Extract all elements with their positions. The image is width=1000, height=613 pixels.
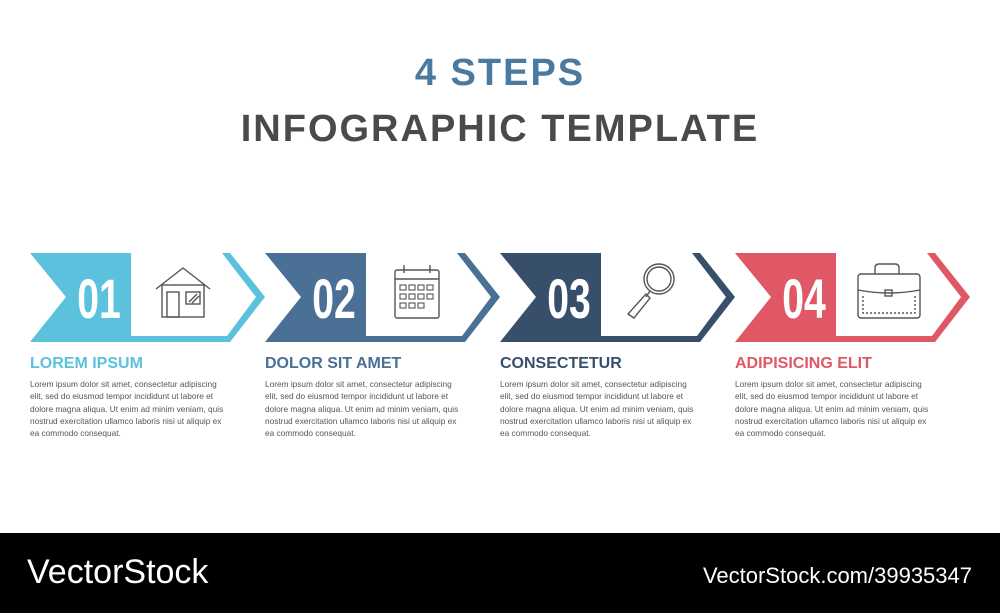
step 4 arrow: [735, 253, 970, 342]
heading 3: CONSECTETUR: [500, 355, 622, 372]
step 3 arrow: [500, 253, 735, 342]
heading 2: DOLOR SIT AMET: [265, 355, 401, 372]
subtitle: INFOGRAPHIC TEMPLATE: [241, 108, 759, 150]
footer id: VectorStock.com/39935347: [703, 563, 972, 588]
step numbers: [77, 268, 826, 331]
step numbers: 04: [782, 268, 826, 331]
step 2 arrow: [265, 253, 500, 342]
footer bar: [0, 533, 1000, 613]
text 2: Lorem ipsum dolor sit amet, consectetur adipiscing elit, sed do eiusmod tempor incididunt ut labore et dolore magna aliqua. Ut enim ad minim veniam, quis nostrud exercitation ullamco laboris nisi ut aliquip ex ea commodo consequat.: [265, 379, 458, 438]
step numbers: 01: [77, 268, 121, 331]
title: 4 STEPS: [415, 52, 585, 94]
footer logo: VectorStock: [27, 553, 208, 591]
text 1: Lorem ipsum dolor sit amet, consectetur adipiscing elit, sed do eiusmod tempor incididunt ut labore et dolore magna aliqua. Ut enim ad minim veniam, quis nostrud exercitation ullamco laboris nisi ut aliquip ex ea commodo consequat.: [30, 379, 223, 438]
heading 1: LOREM IPSUM: [30, 355, 143, 372]
step numbers: 02: [312, 268, 356, 331]
text 4: Lorem ipsum dolor sit amet, consectetur adipiscing elit, sed do eiusmod tempor incididunt ut labore et dolore magna aliqua. Ut enim ad minim veniam, quis nostrud exercitation ullamco laboris nisi ut aliquip ex ea commodo consequat.: [735, 379, 928, 438]
text 3: Lorem ipsum dolor sit amet, consectetur adipiscing elit, sed do eiusmod tempor incididunt ut labore et dolore magna aliqua. Ut enim ad minim veniam, quis nostrud exercitation ullamco laboris nisi ut aliquip ex ea commodo consequat.: [500, 379, 693, 438]
step 1 arrow: [30, 253, 265, 342]
heading 4: ADIPISICING ELIT: [735, 355, 872, 372]
step numbers: 03: [547, 268, 591, 331]
